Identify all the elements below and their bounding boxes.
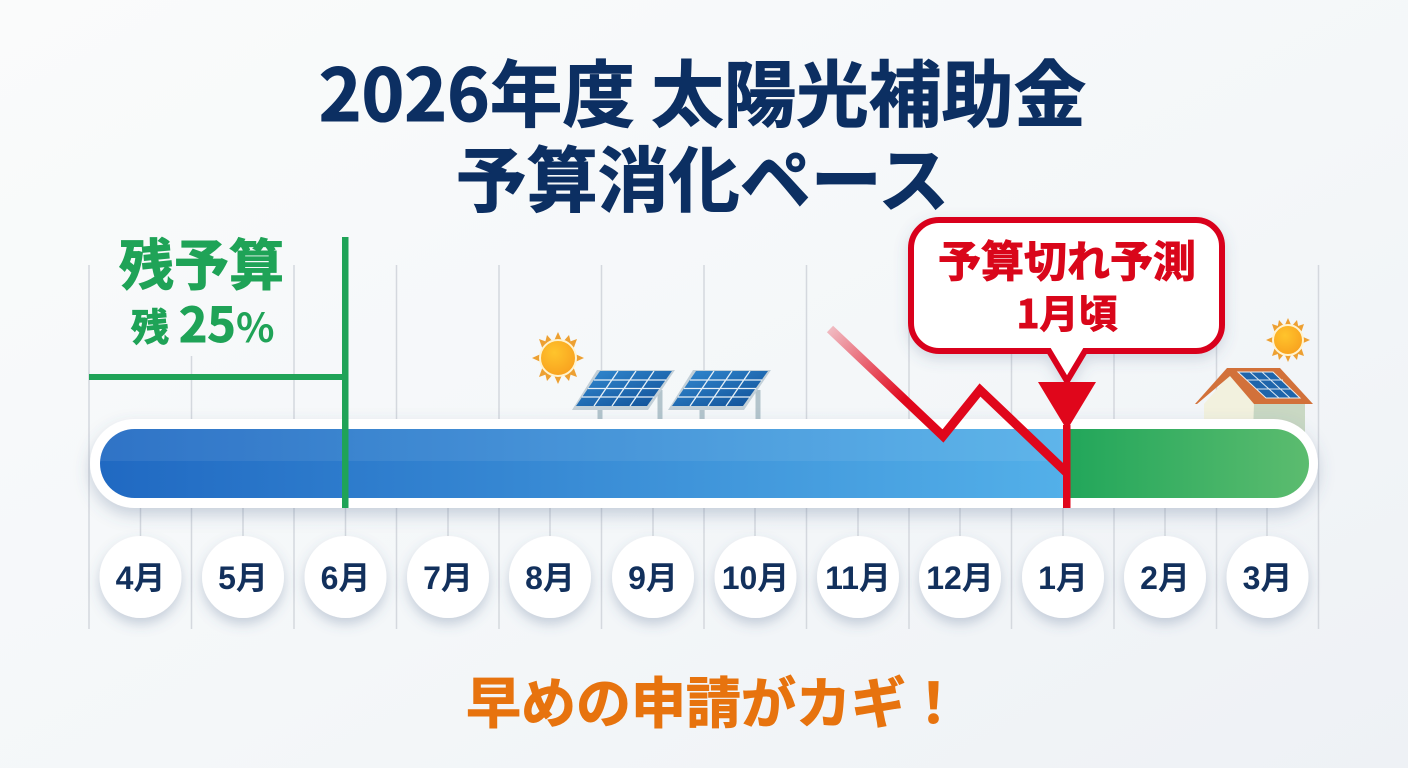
month 2 — [1124, 536, 1206, 618]
progress bar — [90, 419, 1318, 508]
month 6 — [304, 536, 386, 618]
remaining budget label: % — [236, 296, 275, 354]
title: 2026年度 太陽光補助金 — [319, 37, 1086, 142]
month 5: 5月 — [218, 560, 268, 596]
title — [319, 37, 1086, 227]
month 4 — [100, 536, 182, 618]
month 7: 7月 — [423, 560, 473, 596]
month 9: 9月 — [628, 560, 678, 596]
remaining budget label: 残予算 — [119, 221, 284, 301]
month 9 — [612, 536, 694, 618]
month 6: 6月 — [321, 560, 370, 596]
month 12 — [919, 536, 1001, 618]
month 4: 4月 — [116, 560, 165, 596]
icon: solar panel right — [668, 370, 771, 420]
month 10 — [714, 536, 796, 618]
forecast trend line — [830, 329, 1066, 472]
month 7 — [407, 536, 489, 618]
month 2: 2月 — [1140, 560, 1190, 596]
month 12: 12月 — [926, 560, 994, 596]
icon: house with rooftop solar — [1195, 368, 1313, 432]
month 1: 1月 — [1038, 560, 1088, 596]
callout: budget exhaustion forecast: 予算切れ予測 — [938, 228, 1196, 290]
remaining budget label: 25 — [179, 286, 236, 356]
month 5 — [202, 536, 284, 618]
remaining budget label: 残 — [131, 297, 169, 352]
month 1 — [1022, 536, 1104, 618]
icon: large sun — [532, 332, 584, 384]
month 3: 3月 — [1243, 560, 1292, 596]
callout: budget exhaustion forecast: 1月頃 — [1016, 284, 1118, 340]
callout: budget exhaustion forecast — [911, 220, 1222, 381]
month 8: 8月 — [525, 560, 575, 596]
month 8 — [509, 536, 591, 618]
icon: solar panel left — [572, 370, 675, 420]
month 3 — [1226, 536, 1308, 618]
call to action: 早めの申請がカギ！ — [466, 659, 961, 739]
remaining budget label — [119, 221, 284, 356]
month 11: 11月 — [825, 560, 891, 596]
icon: small sun — [1266, 318, 1310, 362]
month 10: 10月 — [722, 560, 789, 596]
month 11 — [817, 536, 899, 618]
month labels — [100, 536, 1308, 618]
red arrow marker — [1038, 382, 1096, 508]
title: 予算消化ペース — [456, 125, 949, 227]
green marker lines — [89, 237, 348, 508]
